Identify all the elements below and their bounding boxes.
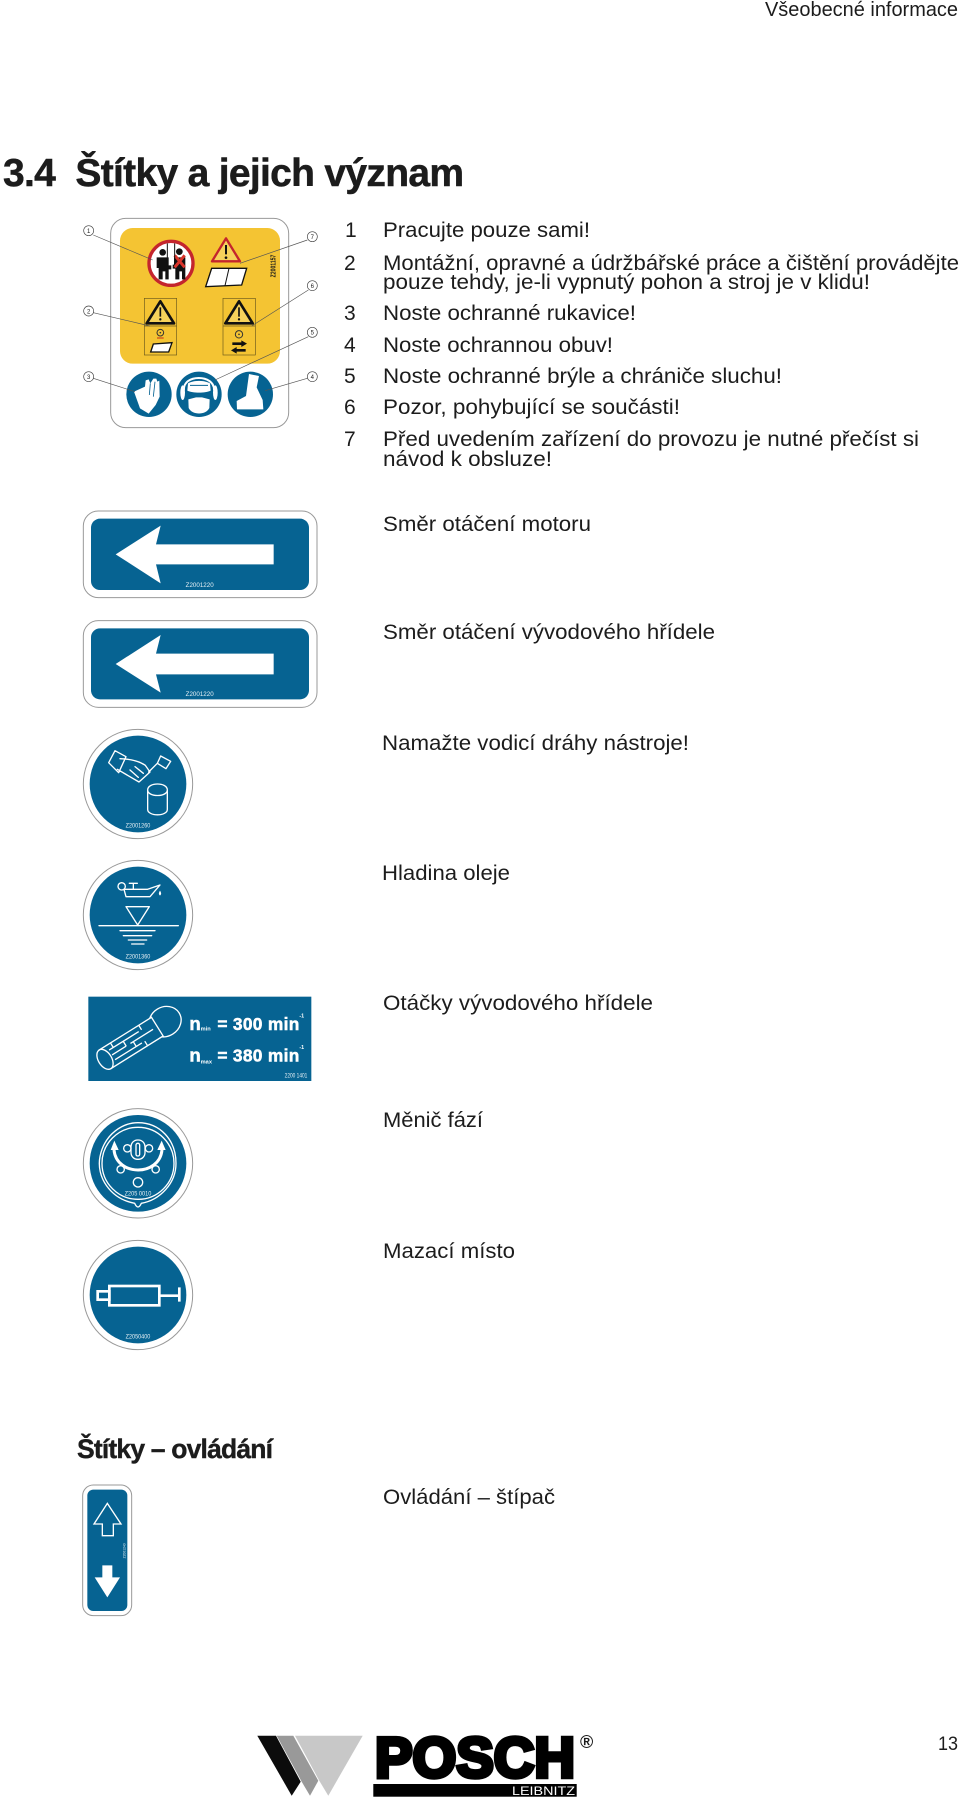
numbered list: 6 xyxy=(344,396,356,419)
numbered list: Noste ochrannou obuv! xyxy=(383,334,613,357)
numbered list: Pozor, pohybující se součásti! xyxy=(383,396,680,419)
speed values: n xyxy=(189,1013,201,1034)
icon: splined shaft xyxy=(94,1000,187,1072)
label: grease point: Mazací místo xyxy=(383,1240,515,1263)
icon: stop before maintenance xyxy=(144,298,177,355)
numbered list: 3 xyxy=(344,302,356,325)
speed values xyxy=(189,1013,304,1066)
logo tagline: LEIBNITZ xyxy=(512,1784,575,1798)
callout numbers: 4 xyxy=(311,375,315,381)
callout numbers: 2 xyxy=(87,309,91,315)
label: lubricate guides: Namažte vodicí dráhy nástroje! xyxy=(382,732,689,755)
numbered list: Noste ochranné rukavice! xyxy=(383,302,636,325)
numbered list: Pracujte pouze sami! xyxy=(383,219,590,242)
icon: no other persons xyxy=(149,241,193,285)
sign: grease point: Z2050400 xyxy=(126,1335,151,1341)
icon: warning triangle with manual xyxy=(206,238,247,287)
callout numbers: 6 xyxy=(311,284,315,290)
callout numbers: 5 xyxy=(311,331,315,337)
speed values: min xyxy=(201,1027,211,1033)
numbered list: 5 xyxy=(344,365,356,388)
numbered list: 4 xyxy=(344,334,356,357)
sign: PTO rotation arrow: Z2001220 xyxy=(186,692,214,698)
numbered list: 2 xyxy=(344,252,356,275)
callout numbers xyxy=(84,226,317,382)
subheading: Štítky – ovládání xyxy=(77,1434,275,1464)
sign: engine rotation arrow: Z2001220 xyxy=(186,583,214,589)
numbered list: Před uvedením zařízení do provozu je nutné přečíst si xyxy=(383,428,919,451)
logo bar xyxy=(373,1784,577,1797)
icon: gloves xyxy=(126,372,172,417)
label: splitter control: Ovládání – štípač xyxy=(383,1486,555,1509)
icon: goggles and ear protection xyxy=(176,372,222,417)
sign: PTO speed: 2200 1401 xyxy=(285,1073,308,1079)
sign: PTO rotation arrow xyxy=(83,621,317,707)
safety sticker panel xyxy=(84,218,317,428)
yellow field xyxy=(120,228,280,364)
sign: lubricate guides xyxy=(83,729,193,839)
title: 3.4 Štítky a jejich význam xyxy=(3,150,464,195)
speed values: max xyxy=(201,1059,213,1065)
icon: boots xyxy=(228,372,273,417)
sign: splitter control xyxy=(83,1485,132,1616)
numbered list xyxy=(344,219,959,471)
page number: 13 xyxy=(938,1734,958,1755)
label: phase changer: Měnič fází xyxy=(383,1109,483,1132)
sign: oil level: Z2001360 xyxy=(126,955,151,961)
logo: Posch Leibnitz xyxy=(257,1726,593,1798)
speed values: n xyxy=(189,1045,201,1066)
sign: splitter control: Z2001240 xyxy=(123,1543,127,1558)
sticker background xyxy=(111,218,289,428)
numbered list: pouze tehdy, je-li vypnutý pohon a stroj je v klidu! xyxy=(383,271,870,294)
callout numbers: 3 xyxy=(87,375,91,381)
sign: PTO speed xyxy=(88,997,311,1081)
speed values: = 380 min xyxy=(217,1046,299,1066)
sticker code: Z2001157 xyxy=(269,255,278,277)
callout numbers: 7 xyxy=(311,235,315,241)
speed values: -1 xyxy=(299,1045,304,1051)
numbered list: Montážní, opravné a údržbářské práce a čištění provádějte xyxy=(383,252,959,275)
sign: grease point xyxy=(83,1240,193,1350)
label: engine rotation: Směr otáčení motoru xyxy=(383,513,591,536)
numbered list: návod k obsluze! xyxy=(383,448,552,471)
numbered list: Noste ochranné brýle a chrániče sluchu! xyxy=(383,365,782,388)
numbered list: 7 xyxy=(344,428,356,451)
label: oil level: Hladina oleje xyxy=(382,862,510,885)
icon: moving parts warning xyxy=(223,298,255,355)
sign: oil level xyxy=(83,860,193,970)
registered mark: ® xyxy=(580,1732,593,1752)
sign: phase changer xyxy=(83,1109,193,1218)
sign: engine rotation arrow xyxy=(83,511,317,598)
label: PTO speed: Otáčky vývodového hřídele xyxy=(383,992,653,1015)
logo wordmark: POSCH xyxy=(375,1726,575,1790)
speed values: = 300 min xyxy=(217,1014,299,1034)
callout numbers: 1 xyxy=(87,229,91,235)
logo mark xyxy=(257,1736,363,1796)
numbered list: 1 xyxy=(345,219,357,242)
label: PTO rotation: Směr otáčení vývodového hřídele xyxy=(383,621,715,644)
sign: lubricate guides: Z2001260 xyxy=(126,824,151,830)
leader lines xyxy=(93,235,308,392)
sign: phase changer: Z205 0010 xyxy=(125,1191,152,1197)
speed values: -1 xyxy=(299,1013,304,1019)
